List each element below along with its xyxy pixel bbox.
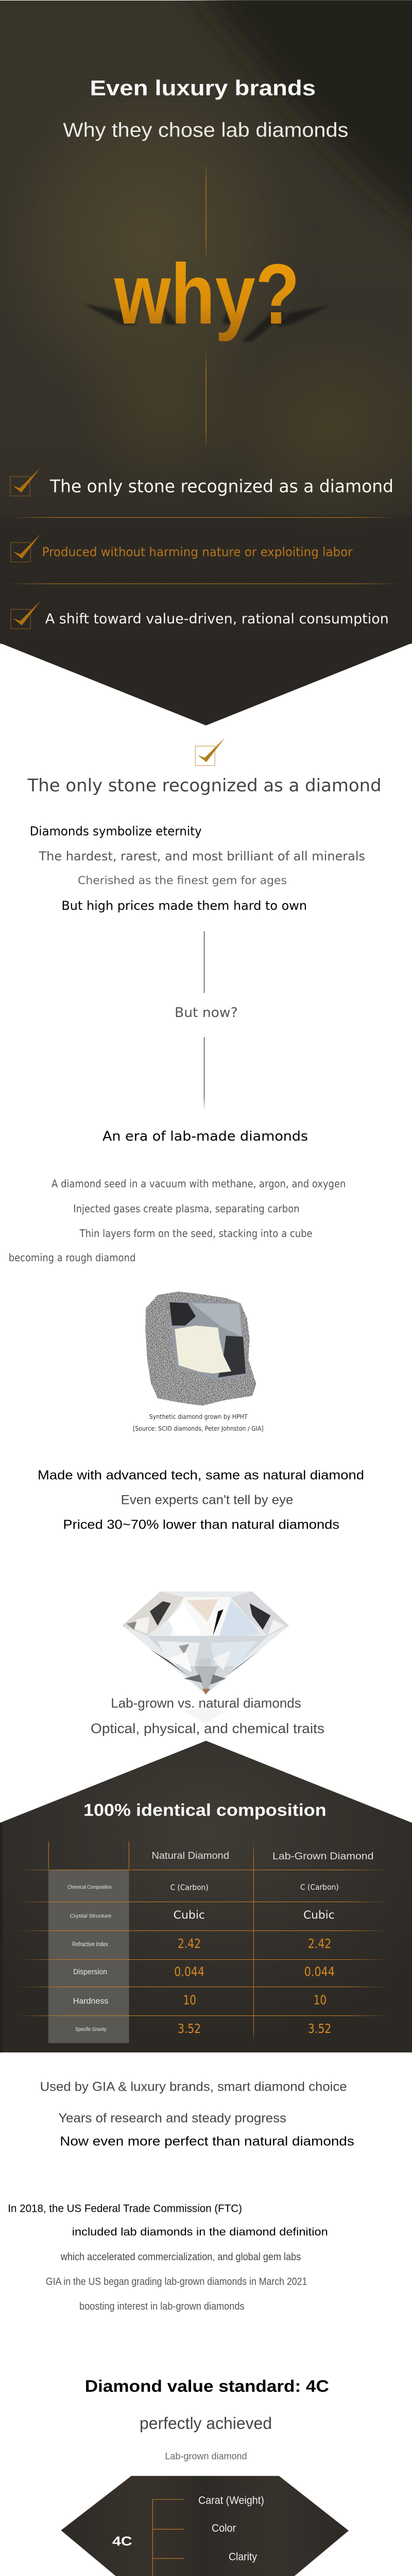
title: Even luxury brands (90, 76, 316, 100)
text block: GIA and luxury brands: Years of research and steady progress (58, 2111, 286, 2125)
column headers: Natural Diamond (151, 1851, 229, 1861)
text block: advanced tech: Made with advanced tech, same as natural diamond (38, 1468, 364, 1483)
row: hardness: Hardness (73, 1997, 108, 2006)
row: crystal structure: Cubic (303, 1909, 335, 1921)
text block: FTC: which accelerated commercialization, and global gem labs (60, 2251, 301, 2263)
reason text: The only stone recognized as a diamond (49, 476, 393, 497)
row: dispersion: Dispersion (73, 1968, 107, 1976)
reason text: Produced without harming nature or exploiting labor (42, 545, 353, 560)
row: hardness: 10 (314, 1992, 327, 2007)
clarity label: Clarity (229, 2551, 257, 2563)
image caption (133, 1413, 264, 1432)
row: hardness: 10 (183, 1992, 196, 2007)
row: crystal structure: Cubic (174, 1909, 205, 1921)
subtitle: Why they chose lab diamonds (63, 120, 348, 142)
panel: composition table (0, 1741, 412, 2053)
reason 2 (11, 534, 353, 562)
text block: process: becoming a rough diamond (9, 1251, 135, 1264)
icon: check box (11, 534, 41, 562)
text block: GIA and luxury brands (40, 2079, 354, 2148)
row: refractive index: 2.42 (308, 1936, 331, 1951)
text block: traits: Optical, physical, and chemical traits (91, 1721, 324, 1736)
reason 3 (11, 601, 389, 629)
reason 1 (10, 468, 393, 497)
heading: 4C standard: Lab-grown diamond (165, 2451, 247, 2461)
why shadow (84, 304, 330, 341)
4C label: 4C (112, 2534, 132, 2549)
text block: eternity: But high prices made them hard to own (61, 899, 307, 913)
row: refractive index: 2.42 (178, 1936, 201, 1951)
image: brilliant diamond (122, 1591, 289, 1723)
heading: 4C standard (85, 2377, 329, 2461)
row: refractive index: Refractive Index (72, 1941, 108, 1947)
text block: process (9, 1177, 346, 1264)
text block: FTC: boosting interest in lab-grown diamonds (79, 2301, 244, 2312)
icon: section check box (195, 738, 225, 766)
text block: FTC: included lab diamonds in the diamond definition (72, 2226, 328, 2238)
row: specific gravity: Specific Gravity (75, 2026, 107, 2032)
text block: process: Thin layers form on the seed, stacking into a cube (79, 1227, 313, 1240)
but now question: But now? (175, 1005, 238, 1021)
row: chemical composition (67, 1883, 339, 1892)
panel: 4C diamond diagram (61, 2476, 349, 2576)
text block: FTC (8, 2202, 328, 2312)
heading: composition: 100% identical composition (83, 1800, 327, 1819)
row: chemical composition: C (Carbon) (170, 1883, 209, 1892)
text block: eternity: Diamonds symbolize eternity (30, 824, 202, 839)
row: dispersion: 0.044 (174, 1964, 204, 1979)
row: dispersion (73, 1964, 335, 1979)
row: refractive index (72, 1936, 331, 1951)
big why text: why? (114, 247, 300, 342)
image caption: Synthetic diamond grown by HPHT (149, 1413, 248, 1420)
icon: check box (10, 468, 40, 496)
row: specific gravity: 3.52 (308, 2021, 331, 2036)
text block: eternity: The hardest, rarest, and most brilliant of all minerals (39, 849, 365, 863)
text block: GIA and luxury brands: Now even more perfect than natural diamonds (60, 2134, 354, 2148)
vertical line above why (206, 161, 207, 263)
row: specific gravity (75, 2021, 331, 2036)
row: crystal structure: Crystal Structure (70, 1913, 111, 1919)
carat label: Carat (Weight) (198, 2495, 264, 2506)
column headers: Lab-Grown Diamond (272, 1851, 374, 1862)
panel: hero dark header (0, 0, 412, 725)
heading: 4C standard: Diamond value standard: 4C (85, 2377, 329, 2396)
icon: check box (11, 601, 41, 629)
column headers (151, 1851, 374, 1862)
text block: traits: Lab-grown vs. natural diamonds (111, 1696, 301, 1711)
image caption: [Source: SCIO diamonds, Peter Johnston / GIA] (133, 1425, 264, 1432)
text block: eternity (30, 824, 365, 913)
row: hardness (73, 1992, 327, 2007)
heading: 4C standard: perfectly achieved (140, 2414, 272, 2433)
row: dispersion: 0.044 (304, 1964, 335, 1979)
text block: advanced tech: Priced 30~70% lower than natural diamonds (63, 1518, 339, 1532)
text block: GIA and luxury brands: Used by GIA & luxury brands, smart diamond choice (40, 2079, 347, 2094)
text block: FTC: GIA in the US began grading lab-grown diamonds in March 2021 (46, 2276, 307, 2287)
label column (48, 1870, 129, 2043)
text block: process: A diamond seed in a vacuum with methane, argon, and oxygen (52, 1177, 346, 1190)
heading: only stone: The only stone recognized as a diamond (27, 775, 382, 796)
text block: advanced tech (38, 1468, 364, 1532)
row: specific gravity: 3.52 (178, 2021, 201, 2036)
text block: eternity: Cherished as the finest gem for ages (78, 874, 287, 887)
row: chemical composition: C (Carbon) (300, 1883, 339, 1892)
row: chemical composition: Chemical Composition (67, 1884, 112, 1890)
row: crystal structure (70, 1909, 334, 1921)
text block: traits (91, 1696, 324, 1736)
image: rough synthetic diamond (145, 1292, 256, 1405)
reason text: A shift toward value-driven, rational consumption (45, 611, 389, 627)
text block: FTC: In 2018, the US Federal Trade Commission (FTC) (8, 2202, 242, 2214)
heading: lab era: An era of lab-made diamonds (102, 1129, 308, 1144)
vertical line below why (206, 348, 207, 450)
text block: advanced tech: Even experts can't tell by eye (121, 1493, 293, 1507)
text block: process: Injected gases create plasma, separating carbon (73, 1202, 300, 1215)
color label: Color (212, 2522, 236, 2534)
